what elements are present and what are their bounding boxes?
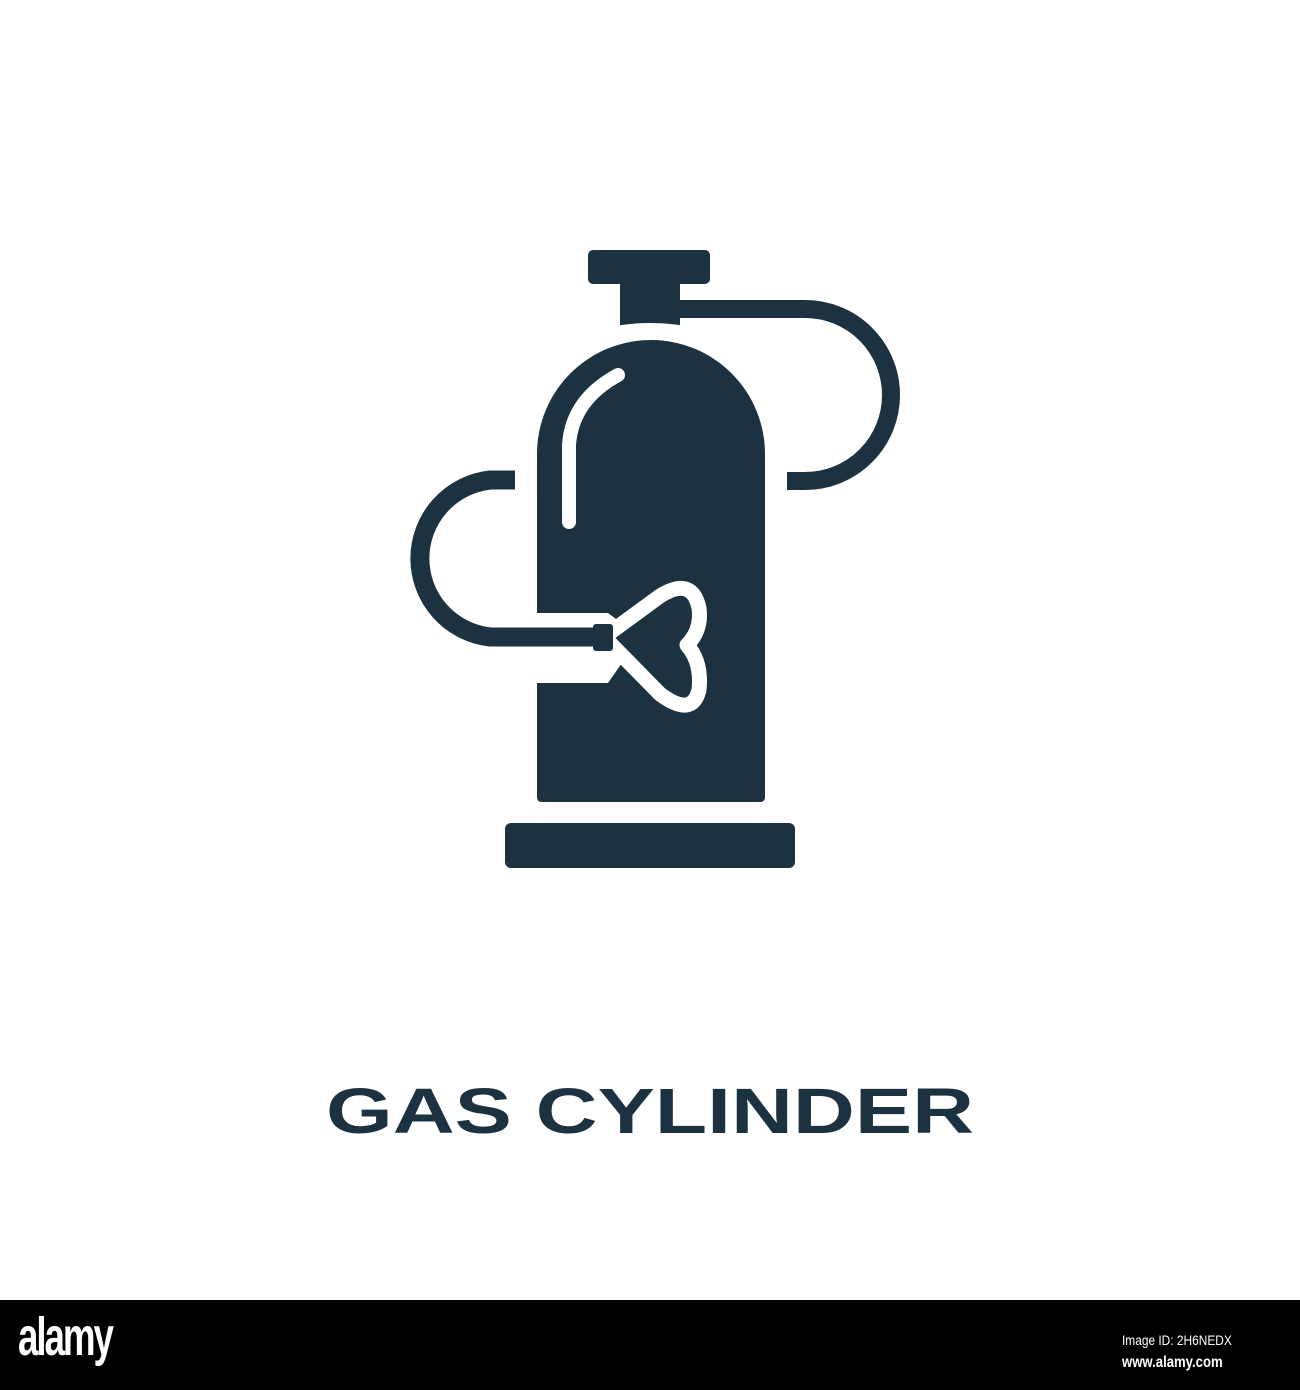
neck gap xyxy=(600,328,700,334)
url: www.alamy.com xyxy=(1122,1354,1223,1371)
footer bar xyxy=(0,1300,1300,1390)
hose top right xyxy=(678,309,891,481)
icon: gas cylinder xyxy=(420,250,891,868)
neck xyxy=(620,280,680,332)
body gap for hose xyxy=(528,613,640,683)
cylinder cap xyxy=(588,250,710,284)
cylinder body xyxy=(537,340,765,802)
hose connector xyxy=(593,624,613,651)
logo: alamy xyxy=(18,1307,112,1367)
base xyxy=(505,823,795,868)
highlight xyxy=(569,375,618,522)
title: GAS CYLINDER xyxy=(326,1075,974,1147)
image id: Image ID: 2H6NEDX xyxy=(1122,1332,1232,1348)
hose left xyxy=(420,480,605,637)
valve xyxy=(604,588,700,705)
